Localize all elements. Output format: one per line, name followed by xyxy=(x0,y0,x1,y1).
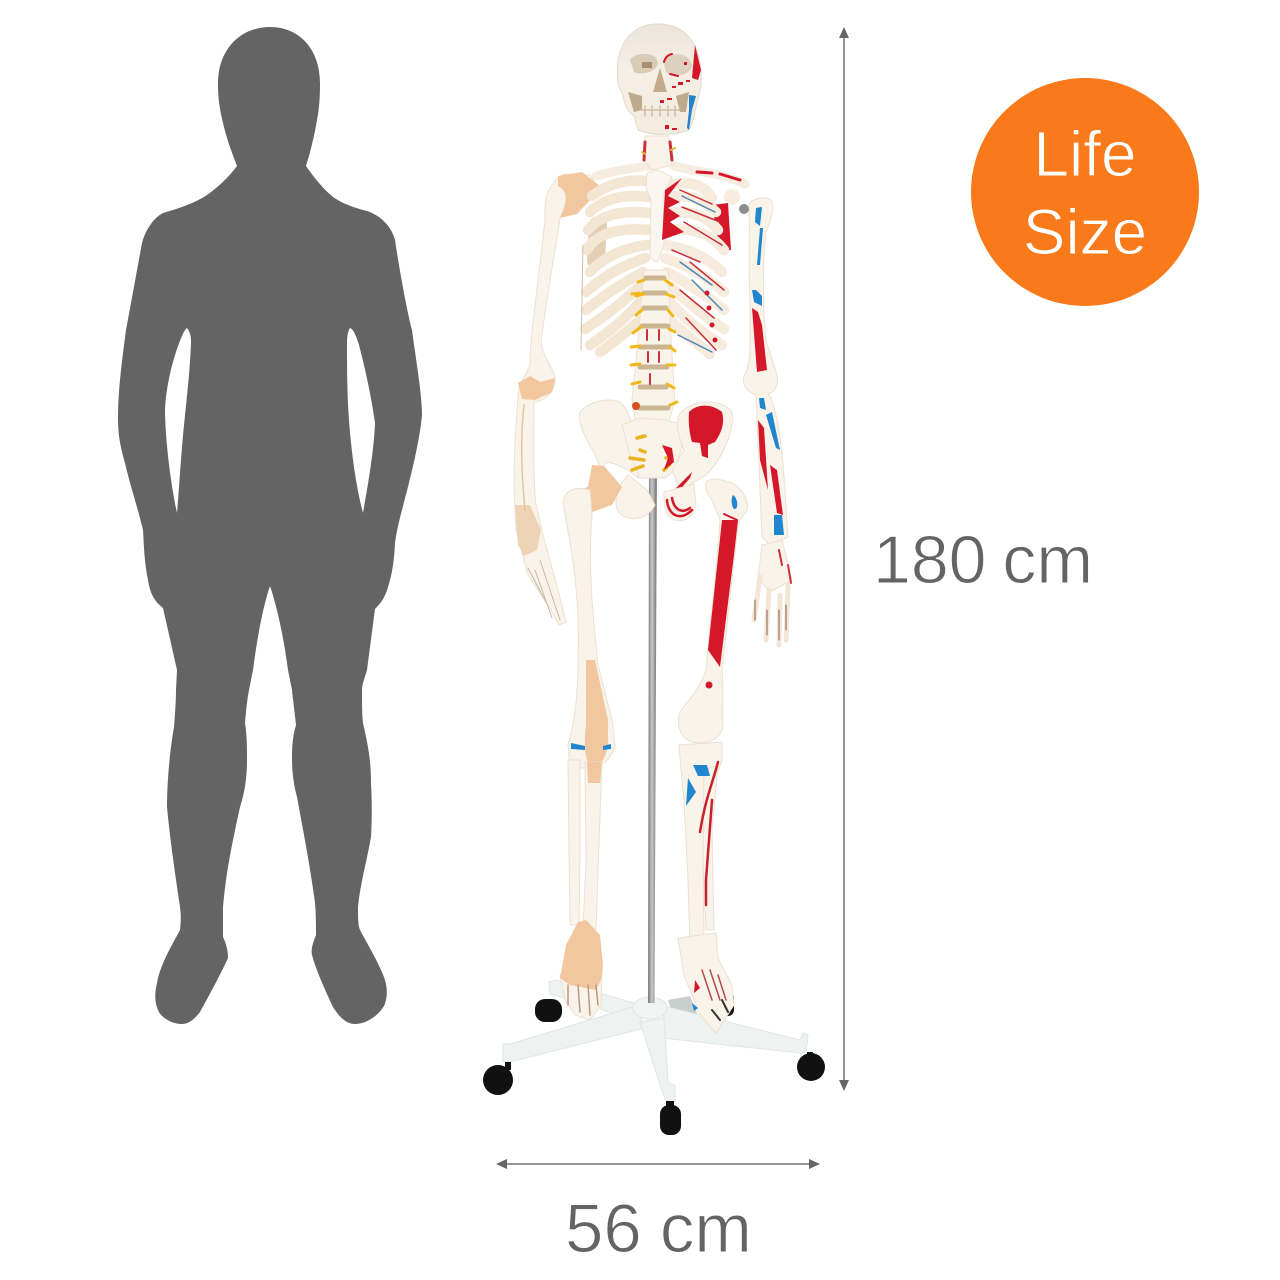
rib cage left side xyxy=(581,181,650,352)
thoracic and lumbar vertebrae xyxy=(632,270,675,425)
life size badge xyxy=(971,78,1199,306)
central hub xyxy=(633,997,667,1019)
left femur with knee ligament xyxy=(563,488,615,768)
masseter xyxy=(687,95,696,130)
anatomical skeleton xyxy=(514,24,792,1033)
sternum and pectoral muscle xyxy=(646,170,684,262)
sacrum xyxy=(622,418,685,478)
left pubis and hip ligaments xyxy=(616,475,655,519)
left lower leg xyxy=(568,760,602,930)
vertical dimension arrow: 180 cm xyxy=(839,27,849,1091)
front legs xyxy=(503,1006,808,1101)
nose xyxy=(653,68,667,92)
eye sockets xyxy=(630,54,658,74)
cheek cavity xyxy=(628,92,642,112)
right ilium with gluteal muscle xyxy=(672,402,732,490)
sacral nerves xyxy=(630,436,672,470)
teeth xyxy=(640,106,680,116)
right lower leg with painted muscles xyxy=(679,742,722,945)
left ilium xyxy=(579,400,640,478)
right scapula muscle xyxy=(712,203,731,252)
width label: 56 cm xyxy=(565,1190,752,1267)
front casters xyxy=(483,1052,825,1135)
right arm with painted muscles xyxy=(743,198,792,645)
temporal muscle xyxy=(692,45,701,80)
left foot with ligaments xyxy=(560,920,603,1020)
skeleton stand xyxy=(483,445,825,1135)
life size badge: Size xyxy=(1023,196,1147,268)
height label: 180 cm xyxy=(873,522,1093,598)
life size badge: Life xyxy=(1033,118,1137,190)
left arm with ligaments xyxy=(514,172,600,625)
skull xyxy=(617,24,701,134)
rib cage right side with painted muscles xyxy=(665,183,724,354)
right femur with painted quadriceps xyxy=(678,479,747,743)
hand bones xyxy=(758,540,792,592)
chrome pole xyxy=(648,445,657,1003)
right foot xyxy=(678,933,734,1033)
pelvis xyxy=(574,400,732,521)
cervical vertebrae xyxy=(642,136,675,170)
right ischium with muscle bands xyxy=(664,484,696,521)
human silhouette xyxy=(118,27,422,1024)
spine with nerves xyxy=(631,136,677,425)
horizontal dimension arrow: 56 cm xyxy=(496,1159,820,1169)
back legs and rear casters xyxy=(535,980,734,1022)
clavicles and shoulder joints xyxy=(596,166,749,214)
